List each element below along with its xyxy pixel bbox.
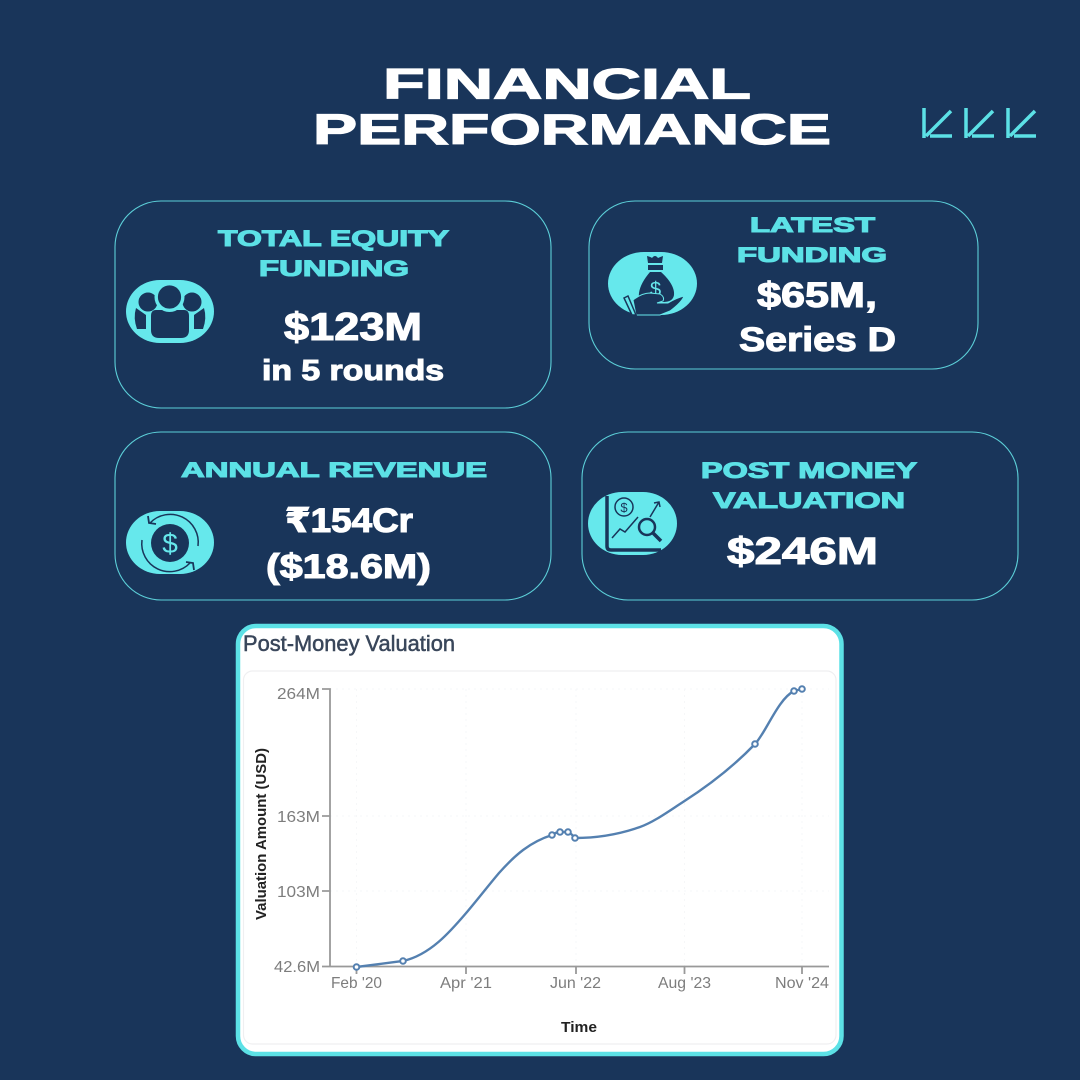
heading: latest funding bbox=[737, 213, 887, 267]
value: rupee revenue: ₹154Cr bbox=[285, 502, 413, 540]
icon: money bag in hand bbox=[608, 252, 697, 315]
x axis labels bbox=[331, 975, 829, 992]
y axis: 42.6M bbox=[274, 959, 320, 976]
chart title: Post-Money Valuation bbox=[243, 631, 455, 656]
text: Series D: Series D bbox=[739, 321, 896, 359]
value: $246M: $246M bbox=[727, 531, 878, 573]
icon: dollar cycle bbox=[126, 511, 214, 574]
x axis labels: Feb '20 bbox=[331, 975, 382, 992]
heading: total equity funding bbox=[218, 226, 449, 281]
heading: post money valuation: POST MONEY bbox=[701, 458, 917, 483]
icon: chart with magnifier bbox=[588, 492, 677, 555]
text: in 5 rounds: in 5 rounds bbox=[262, 355, 444, 387]
x axis labels: Apr '21 bbox=[440, 975, 492, 992]
y axis: 103M bbox=[277, 884, 320, 901]
y axis title: Valuation Amount (USD) bbox=[253, 748, 270, 920]
heading: total equity funding: TOTAL EQUITY bbox=[218, 226, 449, 251]
value: $123M: $123M bbox=[284, 306, 422, 349]
title: PERFORMANCE bbox=[313, 106, 831, 154]
x axis labels: Jun '22 bbox=[550, 975, 601, 992]
icon: decorative arrows bbox=[924, 108, 1036, 138]
heading: total equity funding: FUNDING bbox=[259, 256, 409, 281]
panel: annual revenue bbox=[115, 432, 551, 600]
value: dollar revenue: ($18.6M) bbox=[266, 548, 431, 586]
valuation curve bbox=[356, 689, 802, 967]
heading: post money valuation bbox=[701, 458, 917, 513]
panel: valuation chart bbox=[238, 626, 842, 1054]
panel: latest funding bbox=[589, 201, 978, 369]
heading: latest funding: LATEST bbox=[750, 213, 875, 237]
value: $65M,: $65M, bbox=[757, 276, 877, 315]
icon: group of people bbox=[126, 280, 214, 343]
heading: latest funding: FUNDING bbox=[737, 243, 887, 267]
y axis: 163M bbox=[277, 809, 320, 826]
title bbox=[313, 60, 831, 154]
heading: annual revenue: ANNUAL REVENUE bbox=[181, 458, 487, 482]
panel: total equity funding bbox=[115, 201, 551, 408]
y axis: 264M bbox=[277, 686, 320, 703]
x axis title: Time bbox=[561, 1019, 597, 1036]
heading: post money valuation: VALUATION bbox=[713, 488, 905, 513]
y axis bbox=[274, 686, 829, 976]
icon: chart with magnifier: $ bbox=[620, 500, 628, 515]
line chart bbox=[244, 671, 836, 1044]
title: FINANCIAL bbox=[383, 60, 751, 108]
icon: money bag in hand: $ bbox=[650, 279, 661, 301]
icon: dollar cycle: $ bbox=[162, 528, 178, 559]
panel: post money valuation bbox=[582, 432, 1018, 600]
x axis labels: Nov '24 bbox=[775, 975, 829, 992]
x axis labels: Aug '23 bbox=[658, 975, 711, 992]
data points bbox=[354, 686, 805, 970]
